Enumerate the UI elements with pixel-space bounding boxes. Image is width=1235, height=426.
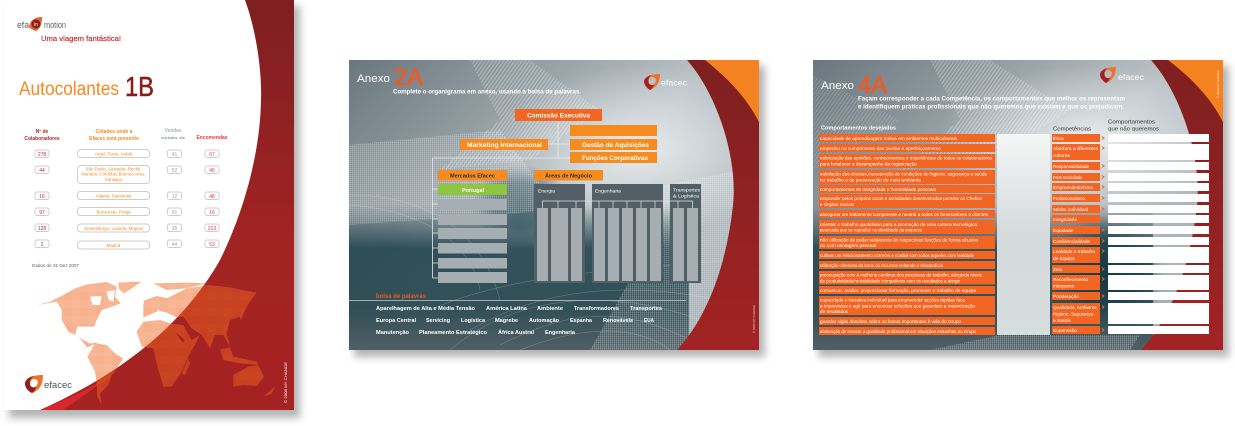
word bag: Servicing xyxy=(426,318,450,324)
list: competencies: Higiene, Segurança xyxy=(1053,312,1093,318)
orange corner xyxy=(705,60,759,122)
tagline: Uma viagem fantástica! xyxy=(41,34,121,43)
column: Mercados Efacec xyxy=(438,170,507,283)
photographic mesh background xyxy=(349,60,790,350)
list: competencies: e Saúde xyxy=(1053,318,1071,324)
word bag: América Latina xyxy=(486,306,527,312)
block: Transportes & Logística xyxy=(670,184,701,283)
logo: efacec: efacec xyxy=(44,380,72,391)
block: Energia xyxy=(534,184,585,283)
table headers: Cidades onde a xyxy=(96,129,133,135)
copyright: © 2008 MY CHANGE xyxy=(752,305,756,333)
list: competencies: Ética xyxy=(1053,135,1064,142)
list: competencies: interpares xyxy=(1053,284,1075,290)
column heading: unwanted behaviours: que não queremos xyxy=(1108,126,1159,132)
list: competencies: Integridade xyxy=(1053,217,1077,223)
title: 1B xyxy=(125,71,154,102)
panel: Anexo 2A organigram xyxy=(349,60,790,357)
list: competencies: de Equipa xyxy=(1053,256,1075,262)
column: Mercados Efacec: Mercados Efacec xyxy=(450,174,495,180)
heading: 2A xyxy=(394,64,423,91)
word bag: Espanha xyxy=(570,318,592,324)
table: data rows: 46 xyxy=(209,168,215,174)
table: data rows: 48 xyxy=(209,194,215,200)
answer boxes xyxy=(1108,134,1209,334)
logo: efa in motion: motion xyxy=(44,20,66,30)
word bag: Manutenção xyxy=(376,330,409,336)
table headers: Colaboradores xyxy=(24,136,60,142)
box: Portugal: Portugal xyxy=(462,188,485,194)
list: desired behaviours: cultivar um relacionamento correcto e cordial com todos aqueles com lealdade xyxy=(820,253,974,258)
word bag: Magrebe xyxy=(495,318,518,324)
word bag: Engenharia xyxy=(545,330,575,336)
list: competencies: Equidade xyxy=(1053,228,1074,234)
table: data rows: Bucareste, Praga xyxy=(97,210,131,214)
table headers: Encomendas xyxy=(196,135,228,141)
word bag: Transportes xyxy=(630,306,662,312)
table: data rows: 16 xyxy=(209,210,215,216)
list: competencies: Lealdade e trabalho xyxy=(1053,249,1095,255)
instruction xyxy=(858,96,1125,110)
block: Energia: Energia xyxy=(538,188,556,194)
list: competencies: culturas xyxy=(1053,153,1070,159)
table: data rows: 51 xyxy=(172,210,177,216)
list: desired behaviours: valorização das opiniões, conhecimentos e experiências de todos os colaboradores xyxy=(820,156,993,160)
table: data rows: Atlanta, Savannah xyxy=(96,194,132,198)
list: desired behaviours: satisfação dos clientes,manutenção de condições de higiene, segurança e saúde xyxy=(820,172,988,176)
block: Engenharia xyxy=(592,184,663,283)
word bag heading: bolsa de palavras xyxy=(376,293,427,300)
list: desired behaviours: assegurar um tratamento competente e neutral a todos os fornecedores e clientes xyxy=(820,212,989,217)
table: data rows: 128 xyxy=(38,226,46,232)
list: desired behaviours: a imprevistos e agir para encontrar soluções que garantam a maximização xyxy=(820,304,976,308)
logo: efa in motion xyxy=(17,17,66,31)
list: competencies: Profissionalismo xyxy=(1053,196,1085,202)
table: data rows: 52 xyxy=(172,168,177,174)
logo: efa in motion: efa xyxy=(17,20,29,30)
word bag: Transformadores xyxy=(574,306,619,312)
table: data rows xyxy=(35,150,219,249)
heading: Anexo xyxy=(357,73,390,85)
box: Comissão Executiva xyxy=(515,109,602,121)
panel: Autocolantes 1B sheet xyxy=(4,0,300,418)
column heading: unwanted behaviours xyxy=(1108,120,1159,132)
box: Gestão de Aquisições xyxy=(570,139,657,150)
logo: efacec: efacec xyxy=(661,78,688,88)
column heading: unwanted behaviours: Comportamentos xyxy=(1108,120,1155,126)
table: data rows: 97 xyxy=(39,210,45,216)
table: data rows: 53 xyxy=(209,242,215,248)
box: Comissão Executiva: Comissão Executiva xyxy=(527,112,591,120)
column: Áreas de Negócio: Áreas de Negócio xyxy=(545,172,592,180)
table headers: unidades: Ale xyxy=(161,135,186,140)
list: desired behaviours: avançada que se reproduz na identidade da empresa xyxy=(820,228,922,232)
list: competencies: Abertura a diferentes xyxy=(1053,146,1099,152)
table: data rows: 16 xyxy=(39,194,45,200)
red curved background xyxy=(40,0,294,410)
table headers: Vendas xyxy=(165,128,182,134)
block: Engenharia: Engenharia xyxy=(595,188,622,194)
list: desired behaviours: para fortalecer o desempenho da organização xyxy=(820,162,918,166)
word bag: Logística xyxy=(461,318,485,324)
table: data rows: 41 xyxy=(172,152,177,158)
title: Autocolantes xyxy=(19,79,119,100)
table: data rows: 2 xyxy=(41,242,44,248)
bright red sliver xyxy=(40,368,120,410)
heading: 4A xyxy=(858,72,887,99)
list: desired behaviours: no trabalho e de preservação do meio ambiente xyxy=(820,178,922,182)
box: Funções Corporativas xyxy=(570,152,657,163)
logo: efacec xyxy=(1100,67,1145,83)
blank market boxes xyxy=(438,199,507,283)
table: data rows: 12 xyxy=(172,194,177,200)
red curved side band xyxy=(677,60,759,350)
heading xyxy=(357,64,423,91)
list: desired behaviours xyxy=(819,134,995,335)
list: desired behaviours: capacidade e iniciativa individual para empreender acções rápidas face xyxy=(820,298,965,302)
instruction: Façam corresponder a cada Competência, os comportamentos que melhor os representam xyxy=(858,96,1125,102)
table: data rows: Joanesburgo, Luanda, Maputo xyxy=(84,226,144,231)
table: data rows: 278 xyxy=(38,152,46,158)
word bag: Aparelhagem de Alta e Média Tensão xyxy=(376,306,475,312)
list: desired behaviours: abstenção de invocar a qualidade profissional em situações estranhas ao Grupo xyxy=(820,329,976,334)
list: desired behaviours: preocupação com a melhoria contínua dos processos de trabalho, atingindo níveis xyxy=(820,272,983,278)
list: competencies: Responsabilidade xyxy=(1053,164,1089,170)
list: desired behaviours: ou com vantagem pessoal xyxy=(820,243,876,248)
box: Marketing Internacional xyxy=(460,139,548,150)
word bag: Ambiente xyxy=(537,306,563,312)
list: competencies: Reconhecimento xyxy=(1053,277,1088,283)
table: data rows: 44 xyxy=(172,242,177,248)
panel: Anexo 4A competencies xyxy=(813,60,1235,357)
box: Gestão de Aquisições: Gestão de Aquisições xyxy=(582,142,650,149)
list: desired behaviours: comunicar, avaliar, proporcionar formação, promover o trabalho de equipa xyxy=(820,288,977,293)
list: competencies: Mérito individual xyxy=(1053,207,1088,213)
heading xyxy=(821,72,887,99)
list: desired behaviours: orientar o trabalho quotidiano para a promoção de uma cultura tecnológica xyxy=(820,222,978,227)
table: data rows: 213 xyxy=(208,226,216,232)
list: desired behaviours: e Órgãos Sociais xyxy=(820,201,855,207)
column heading: competencies: Competências xyxy=(1053,126,1091,132)
word bag: Automação xyxy=(529,318,559,324)
box: Funções Corporativas: Funções Corporativas xyxy=(582,155,649,162)
table: data rows: 67 xyxy=(209,152,215,158)
table: data rows: São Paulo, Salvador, Recife, xyxy=(86,166,141,172)
list: desired behaviours: utilização criteriosa de bens ou recursos evitando o desperdício xyxy=(820,263,943,268)
table: data rows: 35 xyxy=(172,226,177,232)
table: data rows: 44 xyxy=(39,168,45,174)
copyright: © 2008 MY CHANGE xyxy=(284,361,288,403)
arrows xyxy=(1102,136,1104,332)
instruction: e identifiquem práticas profissionais que não queremos que existam e que os prejudicam. xyxy=(858,104,1124,110)
word bag: Europa Central xyxy=(376,318,417,324)
list: desired behaviours: guardar sigilo absoluto sobre os factos importantes à vida do Grupo xyxy=(820,319,962,324)
red curved side band xyxy=(1141,60,1223,350)
list: competencies xyxy=(1052,134,1100,334)
instruction: Complete o organigrama em anexo, usando a bolsa de palavras. xyxy=(393,90,581,96)
word bag: Renováveis xyxy=(603,318,633,324)
connector lines xyxy=(432,121,570,278)
copyright: © 2008 MY CHANGE xyxy=(1216,70,1220,98)
date note: Dados de 31 Dez 2007 xyxy=(32,263,79,268)
list: desired behaviours: comportamentos de integridade e honestidade pessoais xyxy=(820,187,937,192)
orange corner xyxy=(1168,60,1223,122)
block: Transportes & Logística: & Logística xyxy=(673,194,700,198)
block: Transportes & Logística: Transportes xyxy=(673,188,700,192)
box: blank xyxy=(570,125,657,136)
list: competencies: Empreendedorismo xyxy=(1053,185,1093,191)
logo: efacec xyxy=(25,375,72,393)
photographic mesh background xyxy=(813,60,1235,350)
inland seas and bays xyxy=(77,290,174,337)
word bag xyxy=(349,300,686,336)
box: Marketing Internacional: Marketing Internacional xyxy=(467,142,542,149)
table: data rows: Manaus, Córdoba, Buenos Aires, xyxy=(81,172,146,176)
world map xyxy=(37,282,275,405)
list: desired behaviours: de resultados xyxy=(820,309,849,314)
table headers: Efacec está presente xyxy=(89,136,139,142)
word bag: África Austral xyxy=(498,329,535,336)
table: data rows: Argel, Tunis, Asilah xyxy=(95,152,133,156)
list: competencies: Supervisão xyxy=(1053,328,1077,334)
table headers xyxy=(24,128,228,142)
table headers: Nº de xyxy=(36,129,49,135)
heading: Anexo xyxy=(821,80,854,92)
list: desired behaviours: empenho no cumprimento das tarefas e aperfeiçoamento xyxy=(820,146,942,151)
word bag: EUA xyxy=(644,318,654,324)
logo: efacec: efacec xyxy=(1118,72,1145,82)
list: competencies: Qualidade, Ambiente, xyxy=(1053,305,1098,311)
table: data rows: Santiago xyxy=(105,177,123,182)
column heading: desired behaviours: Comportamentos desejados xyxy=(821,126,896,132)
title xyxy=(19,71,154,102)
list: competencies: Forte tecnicidade xyxy=(1053,175,1082,181)
logo: efacec xyxy=(644,74,688,90)
list: competencies: Confidencialidade xyxy=(1053,239,1090,245)
blank matching column xyxy=(997,134,1050,335)
column: Áreas de Negócio xyxy=(534,170,701,283)
list: desired behaviours: capacidade de aprendizagem mútua em ambientes multiculturais xyxy=(820,136,958,141)
word bag: Planeamento Estratégico xyxy=(419,330,487,336)
list: desired behaviours: de produtividade/rentabilidade compatíveis com os resultados a atingir xyxy=(820,278,960,283)
logo: efa in motion: in xyxy=(34,22,38,28)
list: desired behaviours: não utilização de poder subjacente às respectivas funções de forma abusiva xyxy=(820,238,979,242)
list: competencies: Zelo xyxy=(1053,267,1063,273)
table: data rows: Madrid xyxy=(107,243,121,248)
list: competencies: Ponderação xyxy=(1053,294,1079,300)
list: desired behaviours: responder pelos próprios actos e actividades desenvolvidas perante as Chefias xyxy=(820,196,983,201)
